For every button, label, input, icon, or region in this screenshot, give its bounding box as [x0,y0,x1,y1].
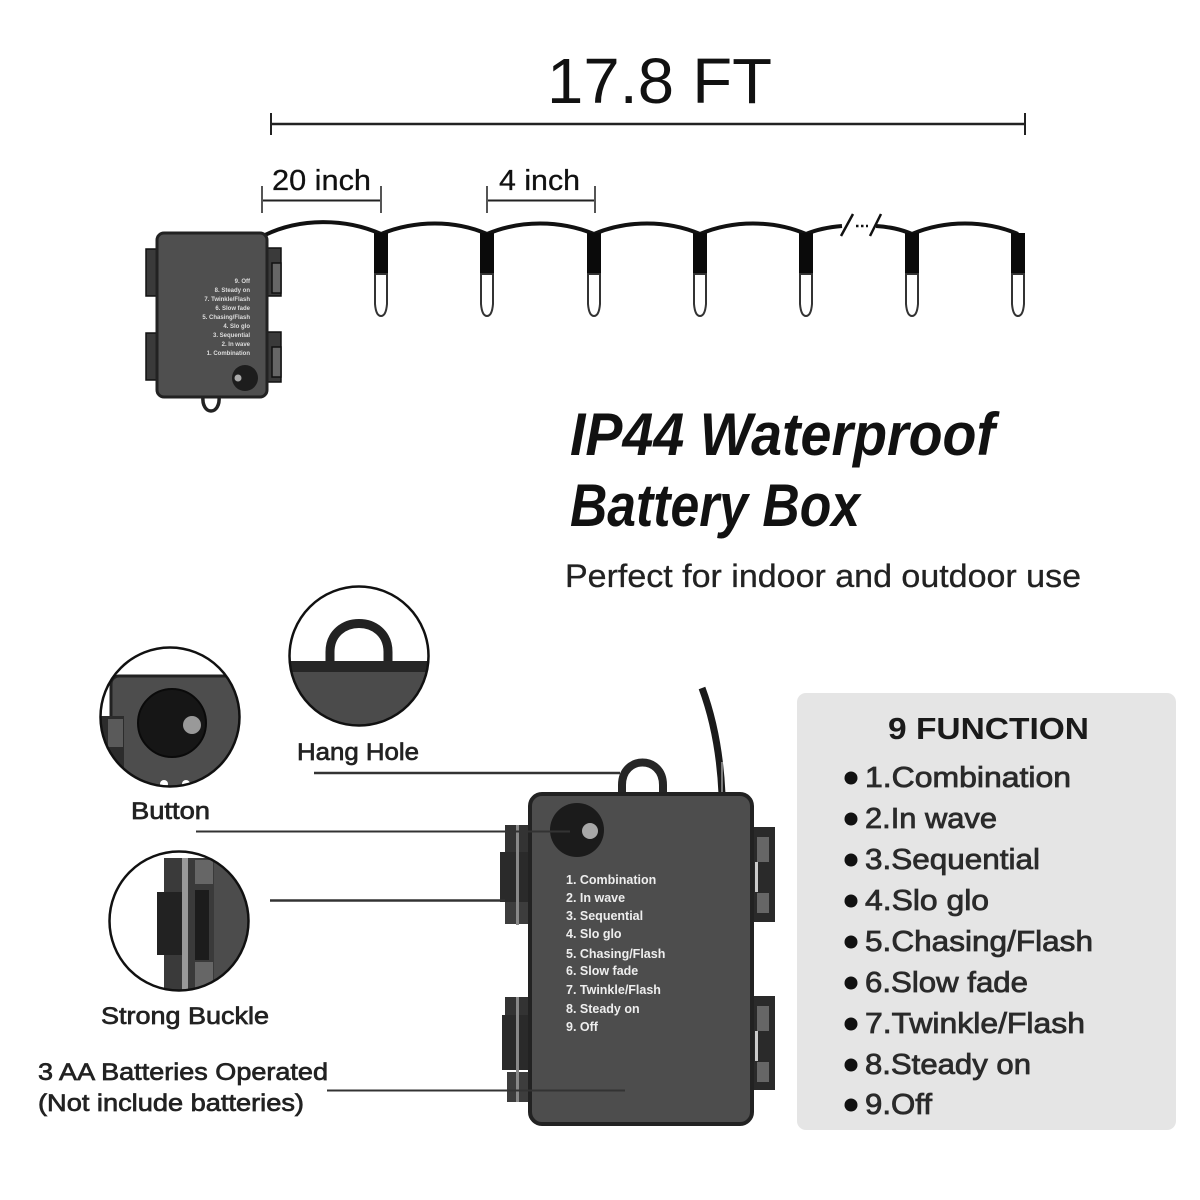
detail circle: button [100,647,246,791]
small box button [232,365,258,391]
detail circle: hang hole [289,586,429,731]
right clips [750,827,775,1090]
label: batteries [38,1059,328,1117]
label: 4 inch spacing [487,165,595,213]
function items: 8.Steady on [865,1049,1031,1081]
LED bulbs [374,233,1025,316]
small box clips [146,248,281,382]
box function list: 6. Slow fade [566,964,638,978]
label: batteries: 3 AA Batteries Operated [38,1059,328,1086]
heading: IP44 Waterproof Battery Box: IP44 Waterproof [570,401,1000,468]
small box body [157,233,267,397]
small box inverted function list: 9. Off [235,279,251,285]
small box inverted function list: 1. Combination [207,351,250,357]
small box inverted function list [202,279,251,357]
heading: IP44 Waterproof Battery Box: Battery Box [570,472,862,539]
box function list: 7. Twinkle/Flash [566,983,661,997]
left clips [500,825,542,1102]
detail circle: strong buckle [110,851,250,993]
function items: 7.Twinkle/Flash [865,1008,1085,1040]
function items: 5.Chasing/Flash [865,926,1093,958]
function items: 3.Sequential [865,844,1040,876]
function items: 9.Off [865,1089,933,1121]
function items: 4.Slo glo [865,885,989,917]
function items: 6.Slow fade [865,967,1028,999]
function items [865,762,1093,1121]
label: 20 inch spacing [262,165,381,213]
box function list: 4. Slo glo [566,927,622,941]
small box inverted function list: 6. Slow fade [215,306,251,312]
panel heading: 9 FUNCTION [888,711,1089,746]
box function list: 8. Steady on [566,1002,640,1016]
light string wire [265,214,1018,236]
label: Button: Button [131,798,210,825]
heading: IP44 Waterproof Battery Box [570,401,1000,539]
small box hang loop [203,396,219,411]
box function list: 3. Sequential [566,909,643,923]
label: Hang Hole: Hang Hole [297,739,419,766]
box function list: 2. In wave [566,891,625,905]
box function list: 1. Combination [566,873,656,887]
box body [530,794,752,1124]
label: 4 inch spacing: 4 inch [499,165,580,197]
panel: 9 function list [797,693,1176,1130]
label: Strong Buckle: Strong Buckle [101,1003,269,1030]
box wires [702,688,722,794]
small battery box [146,233,281,411]
leader lines [196,773,625,1090]
box button [550,803,604,857]
small box inverted function list: 2. In wave [222,342,251,348]
label: 20 inch spacing: 20 inch [272,165,371,197]
small box inverted function list: 3. Sequential [213,333,250,339]
large battery box [500,688,775,1124]
subheading: Perfect for indoor and outdoor use [565,558,1081,594]
box function list: 9. Off [566,1020,599,1034]
title: total length: 17.8 FT [547,45,772,117]
box hang loop [622,762,663,796]
bullets [844,772,858,1112]
small box inverted function list: 7. Twinkle/Flash [204,297,250,303]
label: batteries: (Not include batteries) [38,1090,304,1117]
dimension line: total length [271,113,1025,135]
small box inverted function list: 8. Steady on [215,288,250,294]
box function list [566,873,665,1034]
small box inverted function list: 5. Chasing/Flash [202,315,250,321]
function items: 2.In wave [865,803,997,835]
small box inverted function list: 4. Slo glo [223,324,250,330]
function items: 1.Combination [865,762,1071,794]
box function list: 5. Chasing/Flash [566,947,665,961]
